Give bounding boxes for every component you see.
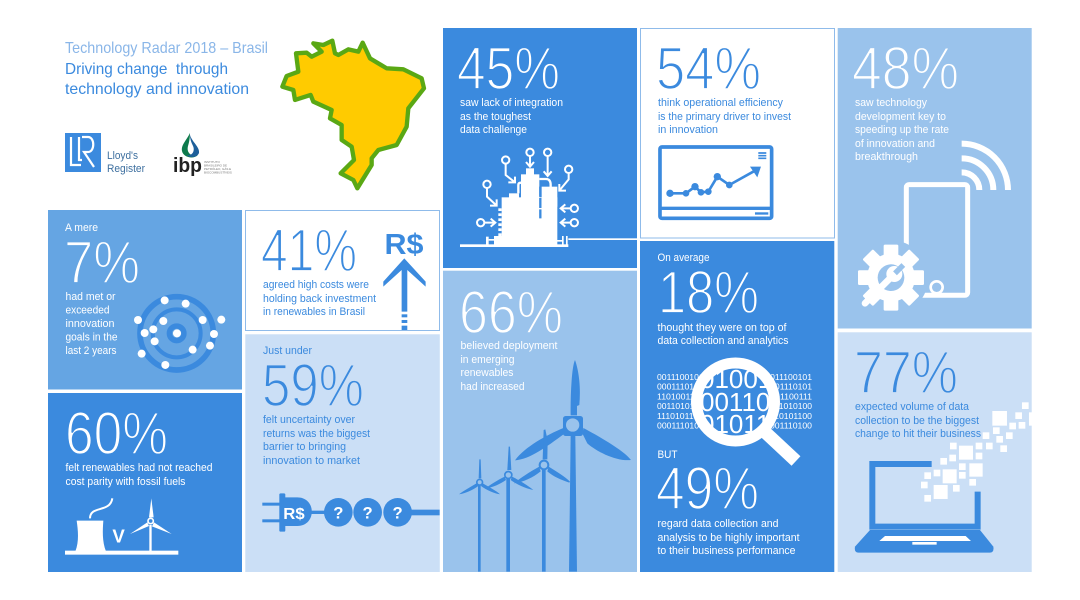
icon: cooling tower versus wind turbine — [65, 498, 178, 555]
panel: 41%: holding back investment — [263, 293, 376, 305]
binary data block: 001110010101001000110100011100101 — [657, 372, 812, 382]
panel: 66% — [443, 271, 637, 572]
panel: 45%: as the toughest — [460, 111, 531, 123]
panel: 45% — [443, 28, 639, 268]
panel: 18% and 49%: 49% — [656, 455, 759, 522]
binary data block — [657, 372, 812, 430]
panel: 18% and 49%: thought they were on top of — [658, 322, 787, 334]
panel: 59%: returns was the biggest — [263, 428, 370, 440]
icon: magnifying glass: 00110 — [700, 387, 770, 417]
logo: ibp: ibp — [173, 155, 202, 177]
panel: 77% — [838, 332, 1032, 572]
binary data block: 000111010010110100101001001110101 — [657, 382, 812, 392]
panel: 7%: A mere — [65, 222, 98, 234]
panel: 54%: 54% — [656, 35, 761, 102]
panel: 41% — [246, 210, 440, 330]
panel: 59% — [245, 334, 440, 572]
panel: 7%: had met or — [66, 291, 116, 303]
panel: 59%: 59% — [262, 352, 364, 419]
logo: Lloyd's Register: Lloyd's — [107, 150, 138, 162]
title: technology and innovation — [65, 81, 249, 98]
icon: map of Brasil — [282, 41, 424, 188]
icon: data refinery with arrows — [460, 149, 639, 247]
icon: plug with question marks: ? — [363, 503, 373, 522]
panel: 48%: speeding up the rate — [855, 124, 949, 136]
binary data block: 001101010010110100101001011010100 — [657, 401, 812, 411]
panel: 7%: exceeded — [66, 304, 110, 316]
icon: plug with question marks: ? — [333, 503, 343, 522]
panel: 7%: innovation — [66, 318, 114, 330]
panel: 45%: 45% — [457, 35, 560, 102]
logo: ibp: BRASILEIRO DE — [204, 164, 227, 168]
panel: 77%: 77% — [854, 339, 958, 406]
panel: 41%: 41% — [261, 217, 357, 284]
panel: 18% and 49%: 18% — [658, 259, 759, 326]
panel: 7%: 7% — [64, 229, 140, 296]
panel: 54%: think operational efficiency — [658, 97, 783, 109]
panel: 59%: innovation to market — [263, 455, 360, 467]
panel: 60%: cost parity with fossil fuels — [66, 476, 186, 488]
icon: plug with question marks: R$ — [283, 506, 305, 523]
panel: 41%: in renewables in Brasil — [263, 306, 365, 318]
icon: magnifying glass: 01001 — [700, 364, 772, 394]
panel: 66%: believed deployment — [460, 340, 558, 352]
logo: Lloyd's Register: Register — [107, 163, 145, 175]
panel: 54% — [640, 28, 834, 238]
panel: 45%: saw lack of integration — [460, 97, 563, 109]
binary data block: 000111010001011010010110001110100 — [657, 420, 812, 430]
panel: 48%: development key to — [855, 111, 946, 123]
panel: 66%: had increased — [460, 381, 524, 393]
panel: 7%: last 2 years — [66, 345, 117, 357]
panel: 18% and 49%: BUT — [658, 449, 678, 461]
title: Technology Radar 2018 – Brasil — [65, 40, 268, 57]
panel: 48%: breakthrough — [855, 151, 918, 163]
panel: 60%: felt renewables had not reached — [66, 462, 212, 474]
icon: laptop with data squares — [855, 402, 1032, 553]
panel: 48%: 48% — [852, 35, 959, 102]
binary data block: 111010110100101101001011010101100 — [657, 411, 812, 421]
icon: magnifying glass — [696, 363, 796, 461]
panel: 59%: barrier to bringing — [263, 441, 346, 453]
panel: 77%: expected volume of data — [855, 401, 970, 413]
logo: ibp: BIOCOMBUSTÍVEIS — [204, 170, 232, 174]
icon: monitor with rising chart — [660, 147, 772, 218]
panel: title and logos — [65, 40, 424, 188]
panel: 7%: goals in the — [66, 332, 118, 344]
panel: 59%: Just under — [263, 345, 312, 357]
icon: radar target — [134, 296, 225, 370]
panel: 66%: in emerging — [460, 354, 514, 366]
panel: 18% and 49%: data collection and analytics — [658, 335, 789, 347]
icon: plug with question marks — [262, 493, 440, 532]
panel: 45%: data challenge — [460, 124, 527, 136]
icon: magnifying glass: 01011 — [700, 409, 770, 439]
panel: 48% — [838, 28, 1032, 328]
panel: 77%: collection to be the biggest — [855, 415, 979, 427]
icon: wind turbines — [459, 360, 631, 572]
panel: 77%: change to hit their business — [855, 428, 981, 440]
panel: 60%: 60% — [65, 400, 168, 467]
panel: 66%: 66% — [459, 279, 563, 346]
panel: 7% — [48, 210, 242, 390]
logo: Lloyd's Register — [65, 133, 145, 175]
panel: 48%: saw technology — [855, 97, 927, 109]
panel: 18% and 49%: On average — [658, 252, 710, 264]
panel: 18% and 49%: analysis to be highly important — [658, 532, 800, 544]
panel: 66%: renewables — [460, 367, 514, 379]
icon: plug with question marks: ? — [393, 503, 403, 522]
title: Driving change through — [65, 61, 228, 78]
panel: 18% and 49%: regard data collection and — [658, 518, 778, 530]
icon: tablet with wifi and gear — [854, 144, 1008, 315]
panel: 18% and 49%: to their business performance — [658, 545, 796, 557]
icon: R$ up arrow: R$ — [384, 229, 424, 261]
binary data block: 110100111010010110100110101100111 — [657, 391, 812, 401]
logo: ibp: PETRÓLEO, GÁS E — [204, 166, 231, 171]
title — [65, 40, 268, 98]
panel: 18% and 49% — [640, 241, 834, 572]
panel: 59%: felt uncertainty over — [263, 414, 355, 426]
panel: 41%: agreed high costs were — [263, 279, 369, 291]
panel: 48%: of innovation and — [855, 138, 935, 150]
panel: 54%: in innovation — [658, 124, 718, 136]
icon: cooling tower versus wind turbine: V — [112, 526, 125, 547]
icon: R$ up arrow — [383, 229, 426, 330]
panel: 60% — [48, 393, 242, 572]
panel: 54%: is the primary driver to invest — [658, 111, 791, 123]
logo: ibp — [173, 133, 232, 177]
logo: ibp: INSTITUTO — [204, 160, 220, 164]
